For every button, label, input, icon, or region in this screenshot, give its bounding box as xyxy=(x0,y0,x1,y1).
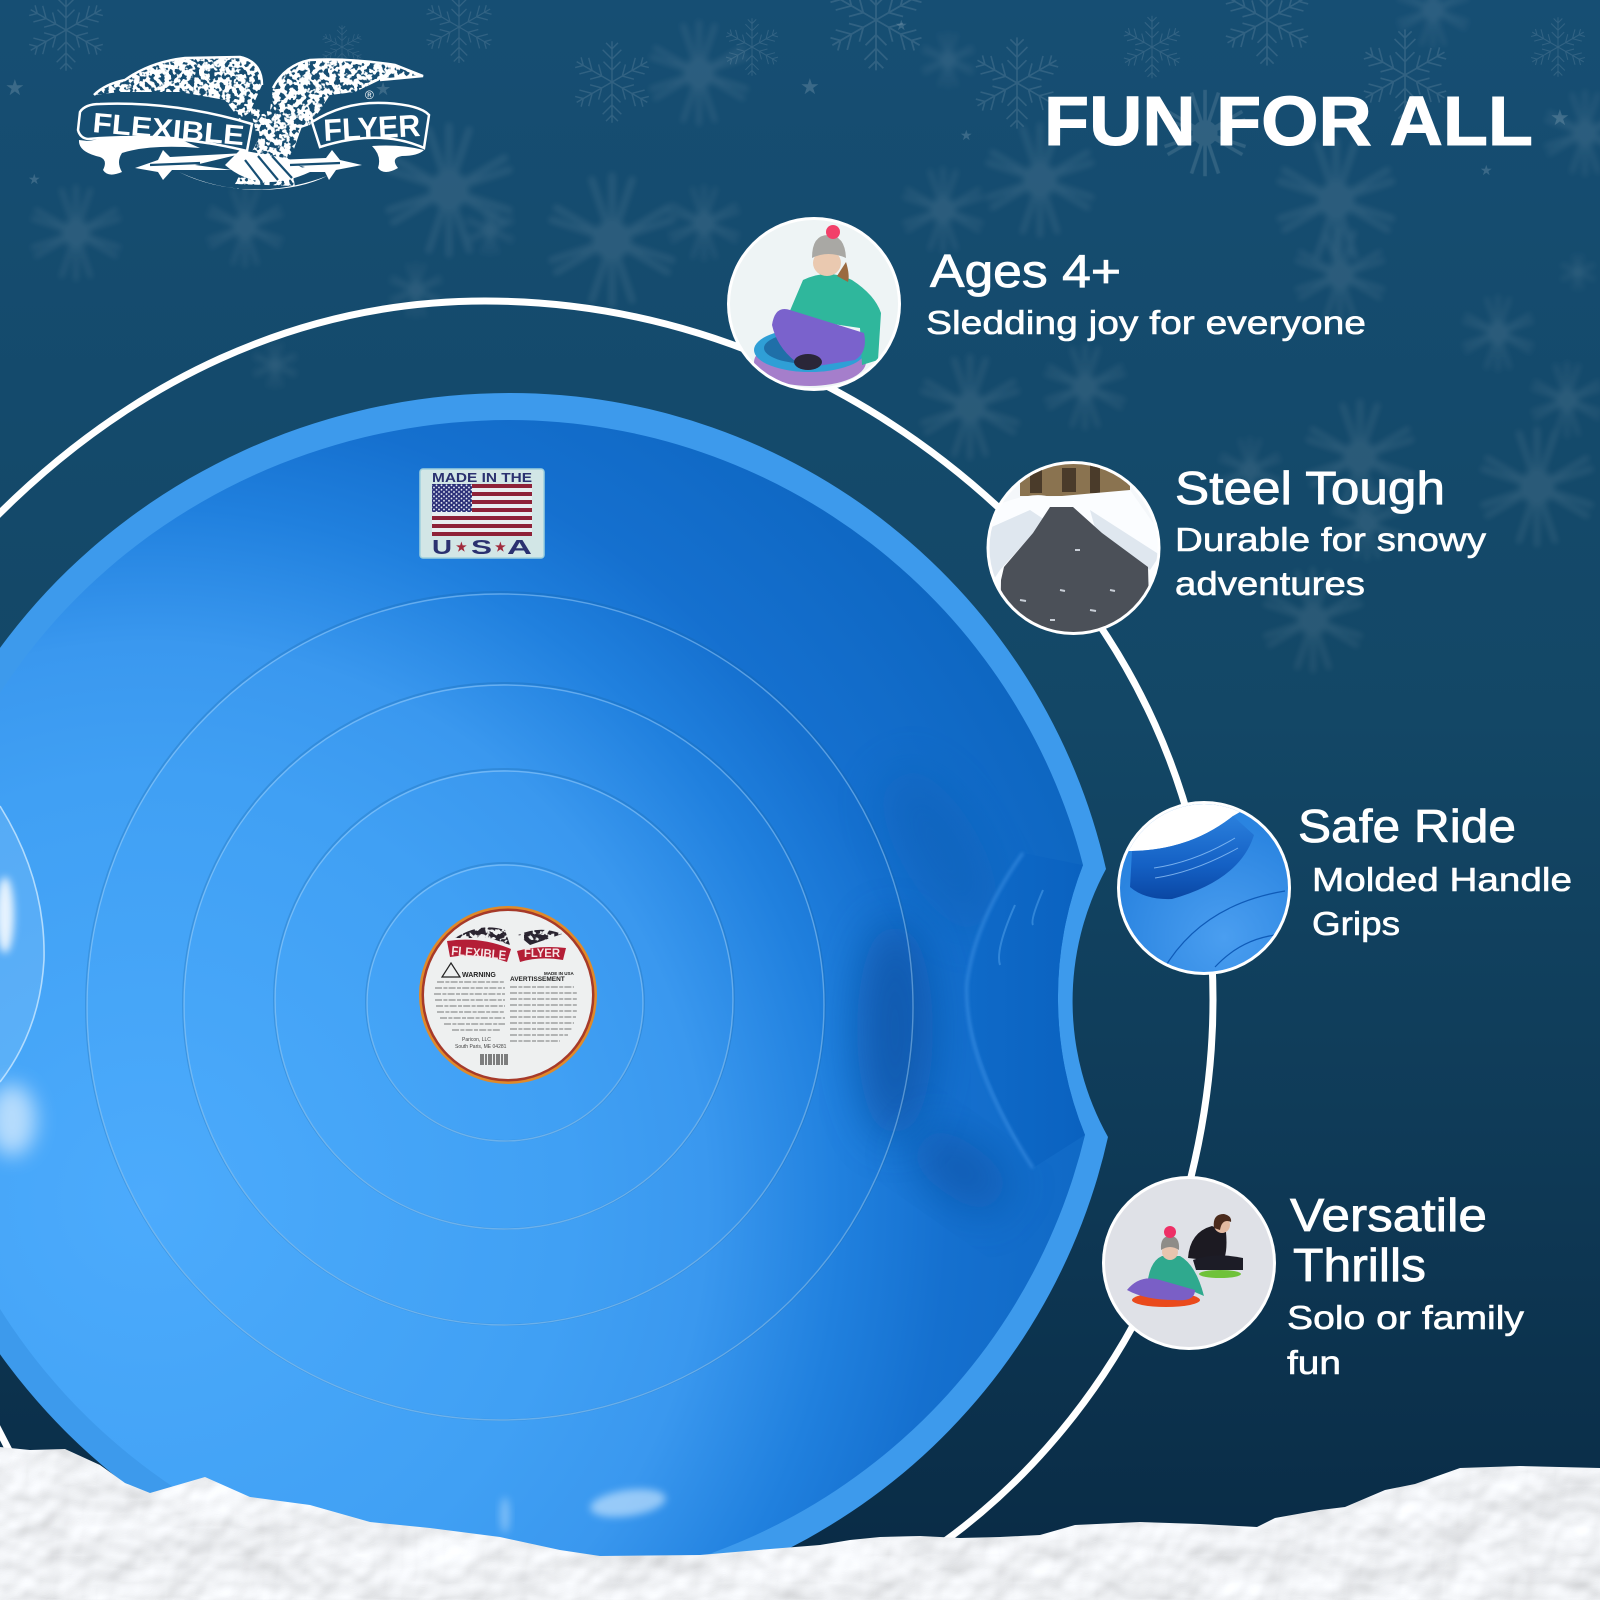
feature: Steel Tough: adventures xyxy=(1175,565,1365,602)
photo: girl on saucer sled xyxy=(720,210,910,400)
background snowflakes: ★ xyxy=(375,79,391,99)
sticker USA lettering xyxy=(432,537,532,559)
photo: shoveled path in snow xyxy=(986,461,1160,635)
sled outer rim xyxy=(0,393,1108,1600)
warning headings: AVERTISSEMENT xyxy=(510,976,565,983)
sticker address xyxy=(455,1037,507,1050)
sticker logo banner: FLEXIBLE xyxy=(451,943,507,963)
snow ground xyxy=(0,1447,1600,1600)
description: Durable for snowy xyxy=(1175,521,1487,558)
background snowflakes xyxy=(5,0,1600,673)
sled basin xyxy=(0,420,1085,1589)
sticker USA lettering: A xyxy=(507,537,532,559)
background snowflakes: ★ xyxy=(5,75,25,100)
background snowflakes: ★ xyxy=(800,74,820,99)
warning fine print xyxy=(434,982,578,1041)
heading: Safe Ride xyxy=(1298,800,1516,852)
banner tails xyxy=(79,136,424,175)
concentric ridges xyxy=(86,592,914,1420)
background snowflakes: ★ xyxy=(1550,105,1570,130)
heading: Ages 4+ xyxy=(930,245,1121,297)
background snowflakes: ★ xyxy=(1480,162,1493,178)
sticker USA lettering: S xyxy=(471,537,492,559)
feature: Ages 4+ xyxy=(720,210,1366,400)
logo banner left xyxy=(78,104,252,151)
sticker logo banner: FLYER xyxy=(524,946,560,960)
sticker: made in the USA xyxy=(420,469,544,559)
heading: Versatile xyxy=(1290,1189,1487,1241)
warning triangle xyxy=(442,963,460,977)
logo text: FLYER: FLYER xyxy=(323,108,421,148)
warning headings xyxy=(462,971,575,983)
round warning sticker xyxy=(419,906,597,1084)
description: Sledding joy for everyone xyxy=(926,304,1366,341)
feature: Versatile Thrills xyxy=(1100,1175,1525,1381)
warning headings: WARNING xyxy=(462,972,496,979)
heading: Steel Tough xyxy=(1175,462,1445,514)
sticker USA lettering: U xyxy=(432,537,452,559)
feature: Steel Tough xyxy=(980,460,1487,640)
photo: molded handle close-up xyxy=(1110,790,1300,985)
warning headings: MADE IN USA xyxy=(544,971,575,976)
background snowflakes: ★ xyxy=(28,171,41,187)
handle grip xyxy=(967,853,1085,1168)
registered mark: ® xyxy=(365,88,374,102)
american flag xyxy=(432,484,532,536)
handle shadow xyxy=(857,920,933,1140)
feature: Safe Ride xyxy=(1110,790,1572,985)
logo banner right xyxy=(312,103,429,148)
feature: Versatile Thrills: Thrills xyxy=(1293,1239,1426,1291)
sticker logo banner xyxy=(447,940,566,963)
bottom glare xyxy=(500,1485,667,1533)
description: Solo or family xyxy=(1287,1299,1525,1336)
left side notch highlight xyxy=(0,806,44,1156)
background snowflakes: ★ xyxy=(960,127,973,143)
sticker USA lettering: ★ xyxy=(495,540,506,554)
connecting ring xyxy=(0,301,1213,1541)
talon stripes xyxy=(150,156,340,182)
lightning bolts and swoosh xyxy=(135,150,362,190)
barcode xyxy=(481,1054,507,1065)
sticker USA lettering: ★ xyxy=(456,540,467,554)
feature: Safe Ride: Grips xyxy=(1312,905,1400,942)
sticker address: Paricon, LLC xyxy=(462,1037,491,1043)
title: FUN FOR ALL xyxy=(1044,82,1533,160)
sticker eagle xyxy=(455,927,562,945)
sticker address: South Paris, ME 04281 xyxy=(455,1044,507,1050)
description: Molded Handle xyxy=(1312,861,1572,898)
sticker heading: MADE IN THE xyxy=(432,471,532,485)
feature: Versatile Thrills: fun xyxy=(1287,1344,1341,1381)
logo: Flexible Flyer eagle xyxy=(78,57,429,190)
eagle wings xyxy=(94,57,423,186)
logo text: FLEXIBLE: FLEXIBLE xyxy=(91,107,246,151)
background snowflakes: ★ xyxy=(895,17,908,33)
sled xyxy=(0,393,1108,1600)
wing outlines xyxy=(94,57,423,95)
photo: family sledding xyxy=(1100,1175,1280,1355)
